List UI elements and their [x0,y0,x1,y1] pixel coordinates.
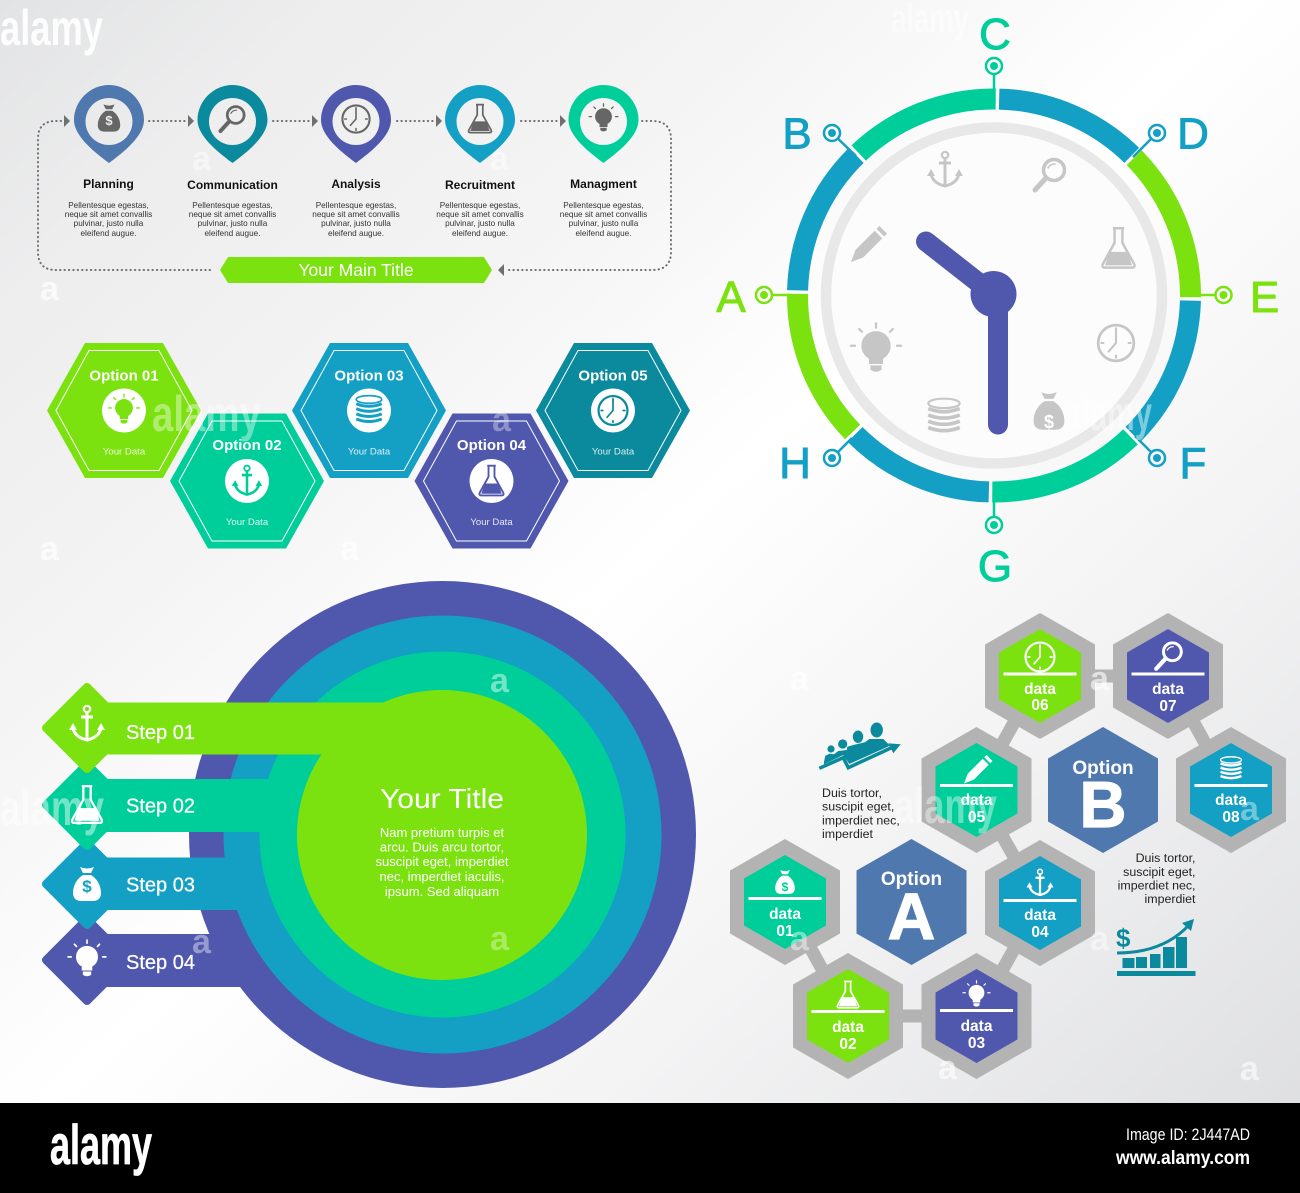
hex: data 08: data [1215,792,1247,809]
hex: data 04: 04 [1031,924,1049,941]
hex: option A [856,839,966,965]
watermarks: a [40,270,60,308]
hexagon: option 02 [170,414,324,548]
pin: recruitment [445,85,515,163]
watermarks: a [490,140,510,178]
panel: hexagon network [730,613,1286,1079]
step text: planning: pulvinar, justo nulla [74,219,144,228]
ring: green with title [297,690,587,980]
icon: magnifier [1035,160,1064,190]
label letters [716,10,1279,591]
text: right note [1118,851,1196,906]
footer bar [0,1103,1300,1193]
ring: teal [260,652,626,1018]
arrowheads [64,115,566,276]
step text: management: neque sit amet convallis [560,210,647,219]
panel: clock diagram [716,10,1279,591]
step text: planning: Pellentesque egestas, [68,201,149,210]
hexagon: option 03: Your Data [348,446,391,458]
step text: analysis: eleifend augue. [328,229,384,238]
step text: recruitment: Pellentesque egestas, [440,201,520,210]
icon: people growth [819,722,901,768]
hex: data 02: 02 [839,1036,857,1053]
dotted return path [38,121,671,270]
step text: communication [187,178,278,238]
hexagon: option 04: Your Data [470,517,513,528]
icon: growth chart: $ [1116,923,1131,953]
text: left note: imperdiet nec, [822,814,900,828]
ring: green with title: suscipit eget, imperdiet [376,854,509,869]
text: left note: suscipit eget, [822,800,894,814]
watermarks: a [790,660,810,698]
step text: management: eleifend augue. [576,229,632,238]
icon: anchor [927,152,963,186]
label letters: F [1180,439,1206,488]
hex: data 03: data [961,1018,993,1035]
label letters: C [979,10,1011,59]
watermarks: a [1240,790,1260,828]
text: right note: imperdiet nec, [1118,878,1196,892]
clock hands [926,242,1016,424]
step text: recruitment: pulvinar, justo nulla [445,219,515,228]
step text: management: pulvinar, justo nulla [569,219,639,228]
hex: data 07: data [1152,681,1184,698]
label letters: G [978,542,1012,591]
panel: concentric steps [46,581,696,1088]
pin: analysis [321,85,391,163]
watermarks: a [490,920,510,958]
step text: analysis: pulvinar, justo nulla [321,219,391,228]
icon: money bag: $ [1044,412,1054,432]
ring: green with title: arcu. Duis arcu tortor, [380,840,504,854]
icon: money bag [1034,392,1064,432]
step text: communication: Pellentesque egestas, [192,201,273,210]
hex: option A: Option [881,869,942,890]
footer bar: www.alamy.com [1115,1148,1250,1169]
step text: analysis: Pellentesque egestas, [316,201,396,210]
text: right note: imperdiet [1145,892,1196,906]
icon: flask [1102,228,1135,268]
pin: planning: $ [105,113,113,128]
connectors [785,676,1231,1016]
step text: recruitment: Recruitment [445,178,515,192]
icon: clock [1098,325,1134,361]
watermarks: alamy [152,386,261,442]
hex: option A: A [888,879,935,953]
icon: growth chart [1116,919,1196,976]
watermarks: a [192,140,212,178]
hex: data 02 [793,953,903,1079]
ring: blue [224,616,662,1054]
step text: analysis: Analysis [331,177,381,191]
step text: communication: Communication [187,178,278,192]
text: right note: Duis tortor, [1136,851,1196,865]
panel: process timeline [38,85,671,283]
step text: communication: eleifend augue. [204,229,260,238]
step text: recruitment: eleifend augue. [452,229,508,238]
ring: green with title: nec, imperdiet iaculis, [380,869,504,884]
step 03 [46,843,300,925]
watermarks: a [790,920,810,958]
hex: data 01: data [769,906,801,923]
label letters: H [779,439,811,488]
clock face [826,128,1162,464]
panel: option hexagons [47,343,690,548]
hexagon: option 01: Your Data [103,446,146,458]
watermarks: a [1090,920,1110,958]
step 04: Step 04 [126,952,195,974]
hex: data 05 [922,727,1032,853]
step text: communication: neque sit amet convallis [189,210,276,219]
hex: data 04: data [1024,907,1056,924]
hexagon: option 04: Option 04 [457,437,527,454]
hexagon: option 03 [292,343,446,478]
hex: data 05: 05 [968,809,985,826]
watermarks: alamy [894,778,997,834]
step text: planning [65,177,152,238]
watermarks: a [40,530,60,568]
hexagon: option 01 [47,343,201,478]
hex: data 04 [985,840,1095,966]
step 03: Step 03 [126,874,195,896]
hex: option B: B [1080,768,1126,841]
text: right note: suscipit eget, [1123,865,1196,879]
watermarks: alamy [1064,388,1152,441]
hex: data 01 [730,839,840,965]
watermarks: a [1090,660,1110,698]
hex: data 08 [1176,727,1286,853]
pin: management [568,85,638,163]
hex: data 07 [1113,613,1223,739]
label letters: D [1177,110,1209,158]
footer bar: alamy [50,1113,152,1176]
hexagon: option 03: Option 03 [334,368,404,384]
hex: data 03: 03 [968,1035,985,1052]
hex: data 01: 01 [776,923,794,940]
hex: option B: Option [1072,758,1134,779]
text: left note: Duis tortor, [822,786,882,800]
callout stems and markers [756,58,1232,533]
hexagon: option 02: Your Data [226,517,269,528]
segmented outer ring [716,18,1272,573]
main title banner: Your Main Title [298,260,414,280]
icon: coins [928,399,960,431]
pin: communication [198,85,268,163]
icon: light bulb [851,323,901,372]
hex: data 06: 06 [1031,697,1049,714]
hexagon: option 05 [536,343,690,478]
hex: data 02: data [832,1019,864,1036]
hexagon: option 01: Option 01 [89,368,159,384]
step 04 [46,919,280,1001]
hexagon: option 02: Option 02 [212,437,282,454]
label letters: A [716,273,746,322]
step text: planning: neque sit amet convallis [65,210,152,219]
step 01 [46,687,396,769]
hex: data 07: 07 [1159,698,1177,715]
watermarks: a [492,401,512,439]
text: left note [822,786,900,841]
ring: indigo [189,581,696,1088]
step 02 [46,764,330,846]
step text: analysis [312,177,400,238]
step 03: $ [82,877,92,896]
hex: option B [1048,727,1158,853]
step text: recruitment [436,178,524,238]
step text: management: Managment [570,177,637,191]
watermarks: a [340,530,360,568]
pin: planning [74,85,144,163]
hex: data 06: data [1024,681,1056,698]
step 01: Step 01 [126,722,195,744]
text: left note: imperdiet [822,827,874,841]
footer bar: Image ID: 2J447AD [1126,1125,1250,1144]
watermarks: a [192,923,212,961]
hexagon: option 04 [414,414,568,548]
step text: management [560,177,647,238]
step text: communication: pulvinar, justo nulla [198,219,268,228]
watermarks: a [938,1049,958,1087]
hex: data 05: data [961,792,993,809]
ring: green with title: Your Title [380,783,504,814]
step text: recruitment: neque sit amet convallis [436,210,524,219]
main title banner [220,257,492,283]
ring: green with title: Nam pretium turpis et [380,825,505,840]
watermarks: a [1240,1050,1260,1088]
label letters: E [1250,273,1279,322]
label letters: B [782,110,812,158]
hex: data 03 [922,953,1032,1079]
step text: planning: Planning [83,177,134,191]
watermarks: alamy [0,780,104,836]
icon: pencil [851,226,887,262]
hexagon: option 05: Option 05 [578,368,648,384]
step text: planning: eleifend augue. [80,229,136,238]
hex: data 06 [985,613,1095,739]
step text: management: Pellentesque egestas, [563,201,644,210]
step text: analysis: neque sit amet convallis [312,210,400,219]
ring: green with title: ipsum. Sed aliquam [385,884,499,899]
hexagon: option 05: Your Data [592,446,635,458]
hex: data 01: $ [782,880,789,894]
hex: data 08: 08 [1222,809,1240,826]
watermarks: a [490,662,510,700]
watermarks: alamy [0,0,103,56]
step 02: Step 02 [126,796,195,818]
